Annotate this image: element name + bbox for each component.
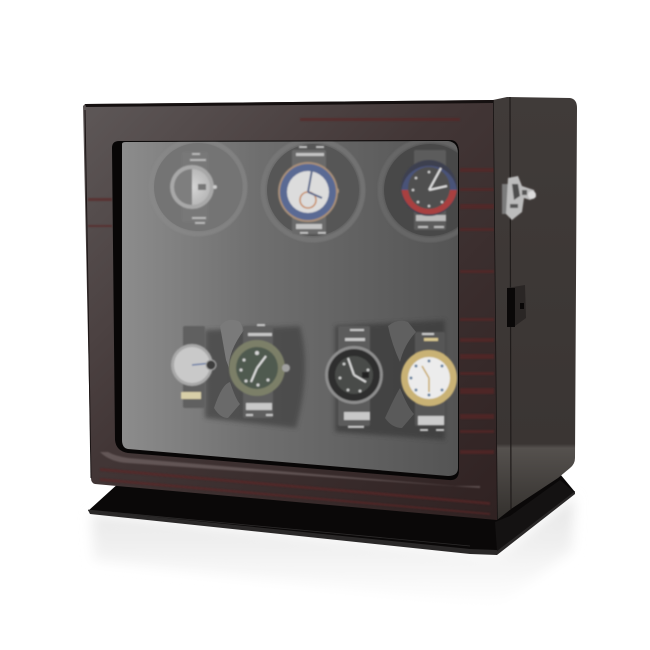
latch [502, 176, 536, 220]
watch 7 [401, 332, 457, 431]
product illustration: watch winder cabinet [83, 97, 577, 573]
watch 5 [229, 324, 290, 418]
lower cradle backdrop [205, 320, 445, 440]
base plinth [88, 474, 575, 555]
watch 3 [401, 150, 457, 230]
glass pane [122, 140, 480, 476]
upper watch cradle rings [178, 141, 458, 242]
watch 4 [171, 326, 216, 408]
floor reflection [92, 497, 574, 605]
front frame with ebony veneer [83, 100, 497, 520]
watch 2 [278, 146, 339, 234]
lower cradle pads [214, 320, 416, 428]
watch 6 [325, 326, 383, 428]
top edge gloss [85, 100, 493, 107]
watch 1 [170, 152, 217, 224]
side panel of cabinet [493, 97, 577, 520]
veneer streaks [88, 118, 494, 515]
power socket [507, 285, 526, 327]
window recess [112, 140, 459, 480]
